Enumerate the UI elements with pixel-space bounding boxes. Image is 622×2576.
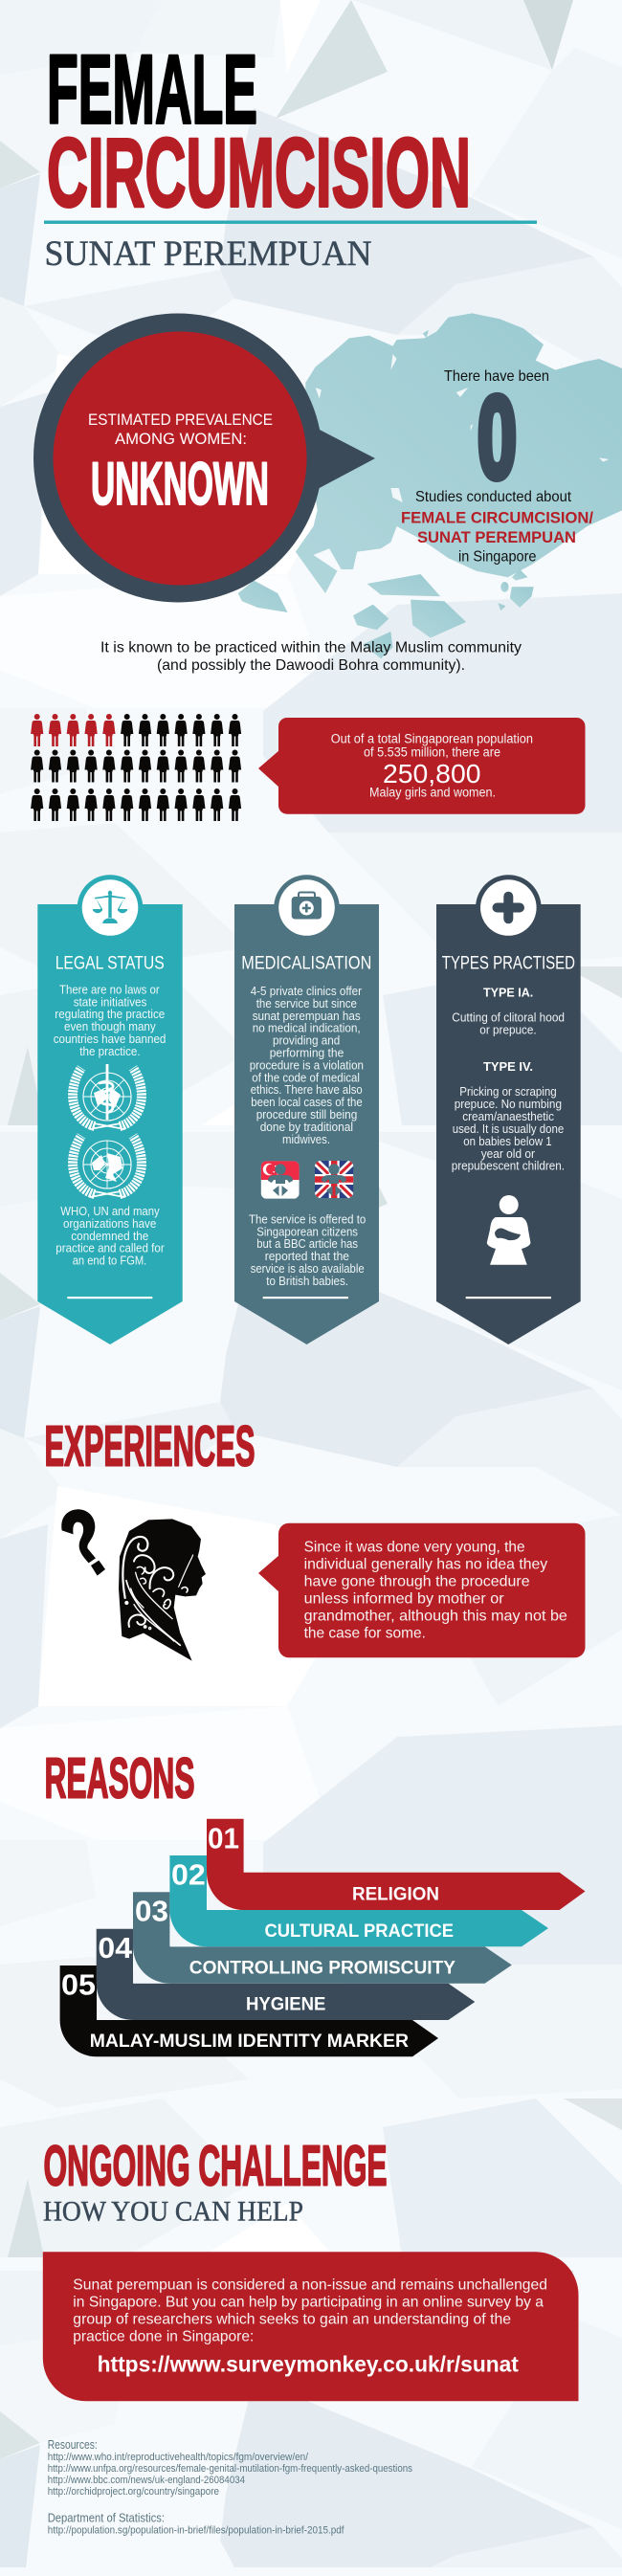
text: condemned: practice and called for [56, 1241, 165, 1255]
text: clinics: the service but since [256, 996, 357, 1010]
panel: types practised [436, 875, 581, 1344]
text: type list: used. It is usually done [453, 1121, 564, 1136]
text: clinics: ethics. There have also [251, 1082, 363, 1097]
text: condemned: organizations have [63, 1216, 156, 1231]
text: clinics: providing and [273, 1033, 340, 1048]
arrow 01: religion: 01 [208, 1822, 239, 1855]
reasons arrow list [60, 1819, 586, 2056]
resources: http://www.unfpa.org/resources/female-genital-mutilation-fgm-frequently-asked-questions [48, 2463, 412, 2475]
text: availability: service is also available [251, 1261, 365, 1276]
text: no laws: even though many [64, 1019, 156, 1033]
resources: http://www.who.int/reproductivehealth/topics/fgm/overview/en/ [48, 2452, 309, 2463]
community note [100, 640, 522, 674]
text: type list: TYPE IA. [483, 986, 533, 1000]
text: type list: TYPE IV. [483, 1059, 533, 1074]
map of Singapore [238, 313, 622, 658]
text: condemned [56, 1204, 165, 1268]
resources: Department of Statistics: [48, 2511, 165, 2525]
resources: http://orchidproject.org/country/singapore [48, 2486, 219, 2498]
text: clinics: of the code of medical [252, 1070, 360, 1084]
text: availability: The service is offered to [249, 1211, 366, 1226]
icon: mother and baby [487, 1195, 530, 1265]
panel: call to action: practice done in Singapore: [73, 2329, 254, 2345]
panel: call to action: https://www.surveymonkey.co.uk/r/sunat [98, 2351, 519, 2376]
arrow 04: hygiene: 04 [98, 1931, 133, 1965]
callout: experiences text: the case for some. [304, 1626, 426, 1642]
text: type list: or prepuce. [479, 1022, 537, 1037]
icon: scales [93, 891, 127, 923]
people pictogram [31, 714, 241, 821]
text: type list: prepubescent children. [452, 1159, 565, 1173]
arrow 04: hygiene: HYGIENE [246, 1994, 325, 2015]
arrow 05: identity marker: MALAY-MUSLIM IDENTITY MARKER [90, 2031, 409, 2052]
text: availability: but a BBC article has [256, 1236, 358, 1251]
text: clinics: procedure still being [256, 1107, 357, 1121]
icon: medical bag [292, 892, 322, 919]
text: no laws: countries have banned [54, 1032, 166, 1046]
arrow 03: controlling promiscuity: CONTROLLING PROMISCUITY [189, 1957, 455, 1978]
text: no laws: state initiatives [74, 994, 147, 1009]
text: type list: Pricking or scraping [459, 1084, 557, 1099]
panel: types practised: TYPES PRACTISED [442, 954, 575, 974]
icon: UN emblem [73, 1136, 142, 1197]
panel: call to action: group of researchers which seeks to gain an understanding of the [73, 2312, 511, 2328]
text: availability: to British babies. [266, 1274, 348, 1288]
text: availability: Singaporean citizens [256, 1224, 358, 1238]
speech circle: estimated prevalence [33, 314, 375, 603]
heading: experiences: EXPERIENCES [44, 1415, 255, 1478]
subtitle: SUNAT PEREMPUAN [44, 234, 371, 274]
text: clinics: procedure is a violation [250, 1057, 364, 1072]
callout: population: Malay girls and women. [369, 786, 496, 800]
callout: experiences text [258, 1523, 586, 1657]
text: type list [452, 986, 565, 1173]
arrow 03: controlling promiscuity [133, 1892, 512, 1984]
community note: (and possibly the Dawoodi Bohra community). [157, 657, 465, 674]
icon: woman in hijab [119, 1519, 206, 1661]
text: condemned: an end to FGM. [73, 1254, 146, 1268]
panel: call to action: in Singapore. But you can help by participating in an online survey by a [73, 2295, 544, 2311]
text: type list: Cutting of clitoral hood [452, 1010, 565, 1025]
text: clinics: performing the [270, 1045, 344, 1060]
text: no laws [54, 982, 166, 1058]
panel: call to action [43, 2252, 579, 2401]
arrow 02: cultural practice [169, 1855, 548, 1946]
callout: population: 250,800 [383, 759, 480, 788]
text: condemned: condemned the [71, 1229, 148, 1243]
zero studies statement: 0 [478, 372, 517, 502]
zero studies statement: in Singapore [458, 549, 537, 566]
text: type list: prepuce. No numbing [455, 1097, 562, 1111]
callout: population: of 5.535 million, there are [364, 745, 500, 760]
panel: call to action: Sunat perempuan is considered a non-issue and remains unchallenged [73, 2277, 547, 2294]
text: clinics: sunat perempuan has [253, 1009, 361, 1023]
text: type list: cream/anaesthetic [462, 1109, 554, 1123]
text: clinics [250, 984, 364, 1146]
speech circle: estimated prevalence: UNKNOWN [91, 451, 269, 518]
arrow 05: identity marker: 05 [61, 1967, 96, 2001]
zero studies statement [401, 368, 593, 566]
callout: experiences text: individual generally has no idea they [304, 1557, 547, 1573]
icon: UK flag with baby [315, 1161, 353, 1198]
title: FEMALE [47, 34, 257, 144]
panel: legal status [37, 875, 183, 1344]
callout: population [258, 718, 586, 814]
arrow 02: cultural practice: CULTURAL PRACTICE [264, 1921, 454, 1942]
zero studies statement: Studies conducted about [415, 489, 572, 505]
text: clinics: been local cases of the [251, 1095, 363, 1109]
callout: experiences text: Since it was done very young, the [304, 1540, 525, 1556]
panel: medicalisation [234, 875, 379, 1344]
arrow 03: controlling promiscuity: 03 [135, 1895, 168, 1928]
subheading: how you can help: HOW YOU CAN HELP [43, 2196, 303, 2228]
callout: experiences text: unless informed by mother or [304, 1591, 504, 1608]
icon: question mark [61, 1509, 105, 1576]
text: condemned: WHO, UN and many [60, 1204, 160, 1218]
text: no laws: the practice. [79, 1044, 141, 1058]
text: availability: reported that the [265, 1249, 349, 1263]
panel: legal status: LEGAL STATUS [56, 954, 165, 974]
resources: Resources: [48, 2437, 98, 2452]
text: clinics: done by traditional [260, 1120, 353, 1134]
text: type list: on babies below 1 [463, 1134, 552, 1148]
icon: Singapore flag with baby [261, 1161, 300, 1199]
arrow 02: cultural practice: 02 [171, 1857, 206, 1891]
text: type list: year old or [481, 1146, 536, 1161]
icon: plus [498, 897, 520, 919]
speech circle: estimated prevalence: ESTIMATED PREVALENCE [88, 411, 273, 429]
arrow 01: religion [207, 1819, 586, 1910]
icon: WHO emblem [73, 1064, 142, 1129]
text: no laws: There are no laws or [59, 982, 160, 997]
resources [48, 2437, 412, 2537]
arrow 05: identity marker [60, 1965, 438, 2056]
title [47, 34, 471, 228]
text: clinics: midwives. [282, 1132, 330, 1146]
callout: experiences text: grandmother, although this may not be [304, 1609, 567, 1625]
panel: medicalisation: MEDICALISATION [241, 954, 371, 974]
resources: http://www.bbc.com/news/uk-england-26084034 [48, 2475, 245, 2486]
callout: experiences text: have gone through the procedure [304, 1574, 530, 1590]
text: clinics: no medical indication, [253, 1021, 361, 1035]
callout: population: Out of a total Singaporean population [331, 732, 533, 746]
arrow 01: religion: RELIGION [352, 1884, 439, 1905]
arrow 04: hygiene [97, 1929, 475, 2020]
speech circle: estimated prevalence: AMONG WOMEN: [115, 430, 247, 448]
resources: http://population.sg/population-in-brief/files/population-in-brief-2015.pdf [48, 2525, 344, 2537]
zero studies statement: SUNAT PEREMPUAN [417, 528, 576, 546]
community note: It is known to be practiced within the Malay Muslim community [100, 640, 522, 656]
heading: reasons: REASONS [44, 1746, 195, 1810]
text: clinics: 4-5 private clinics offer [251, 984, 363, 998]
text: no laws: regulating the practice [55, 1007, 165, 1021]
zero studies statement: FEMALE CIRCUMCISION/ [401, 509, 593, 527]
zero studies statement: There have been [444, 368, 549, 385]
text: availability [249, 1211, 366, 1288]
